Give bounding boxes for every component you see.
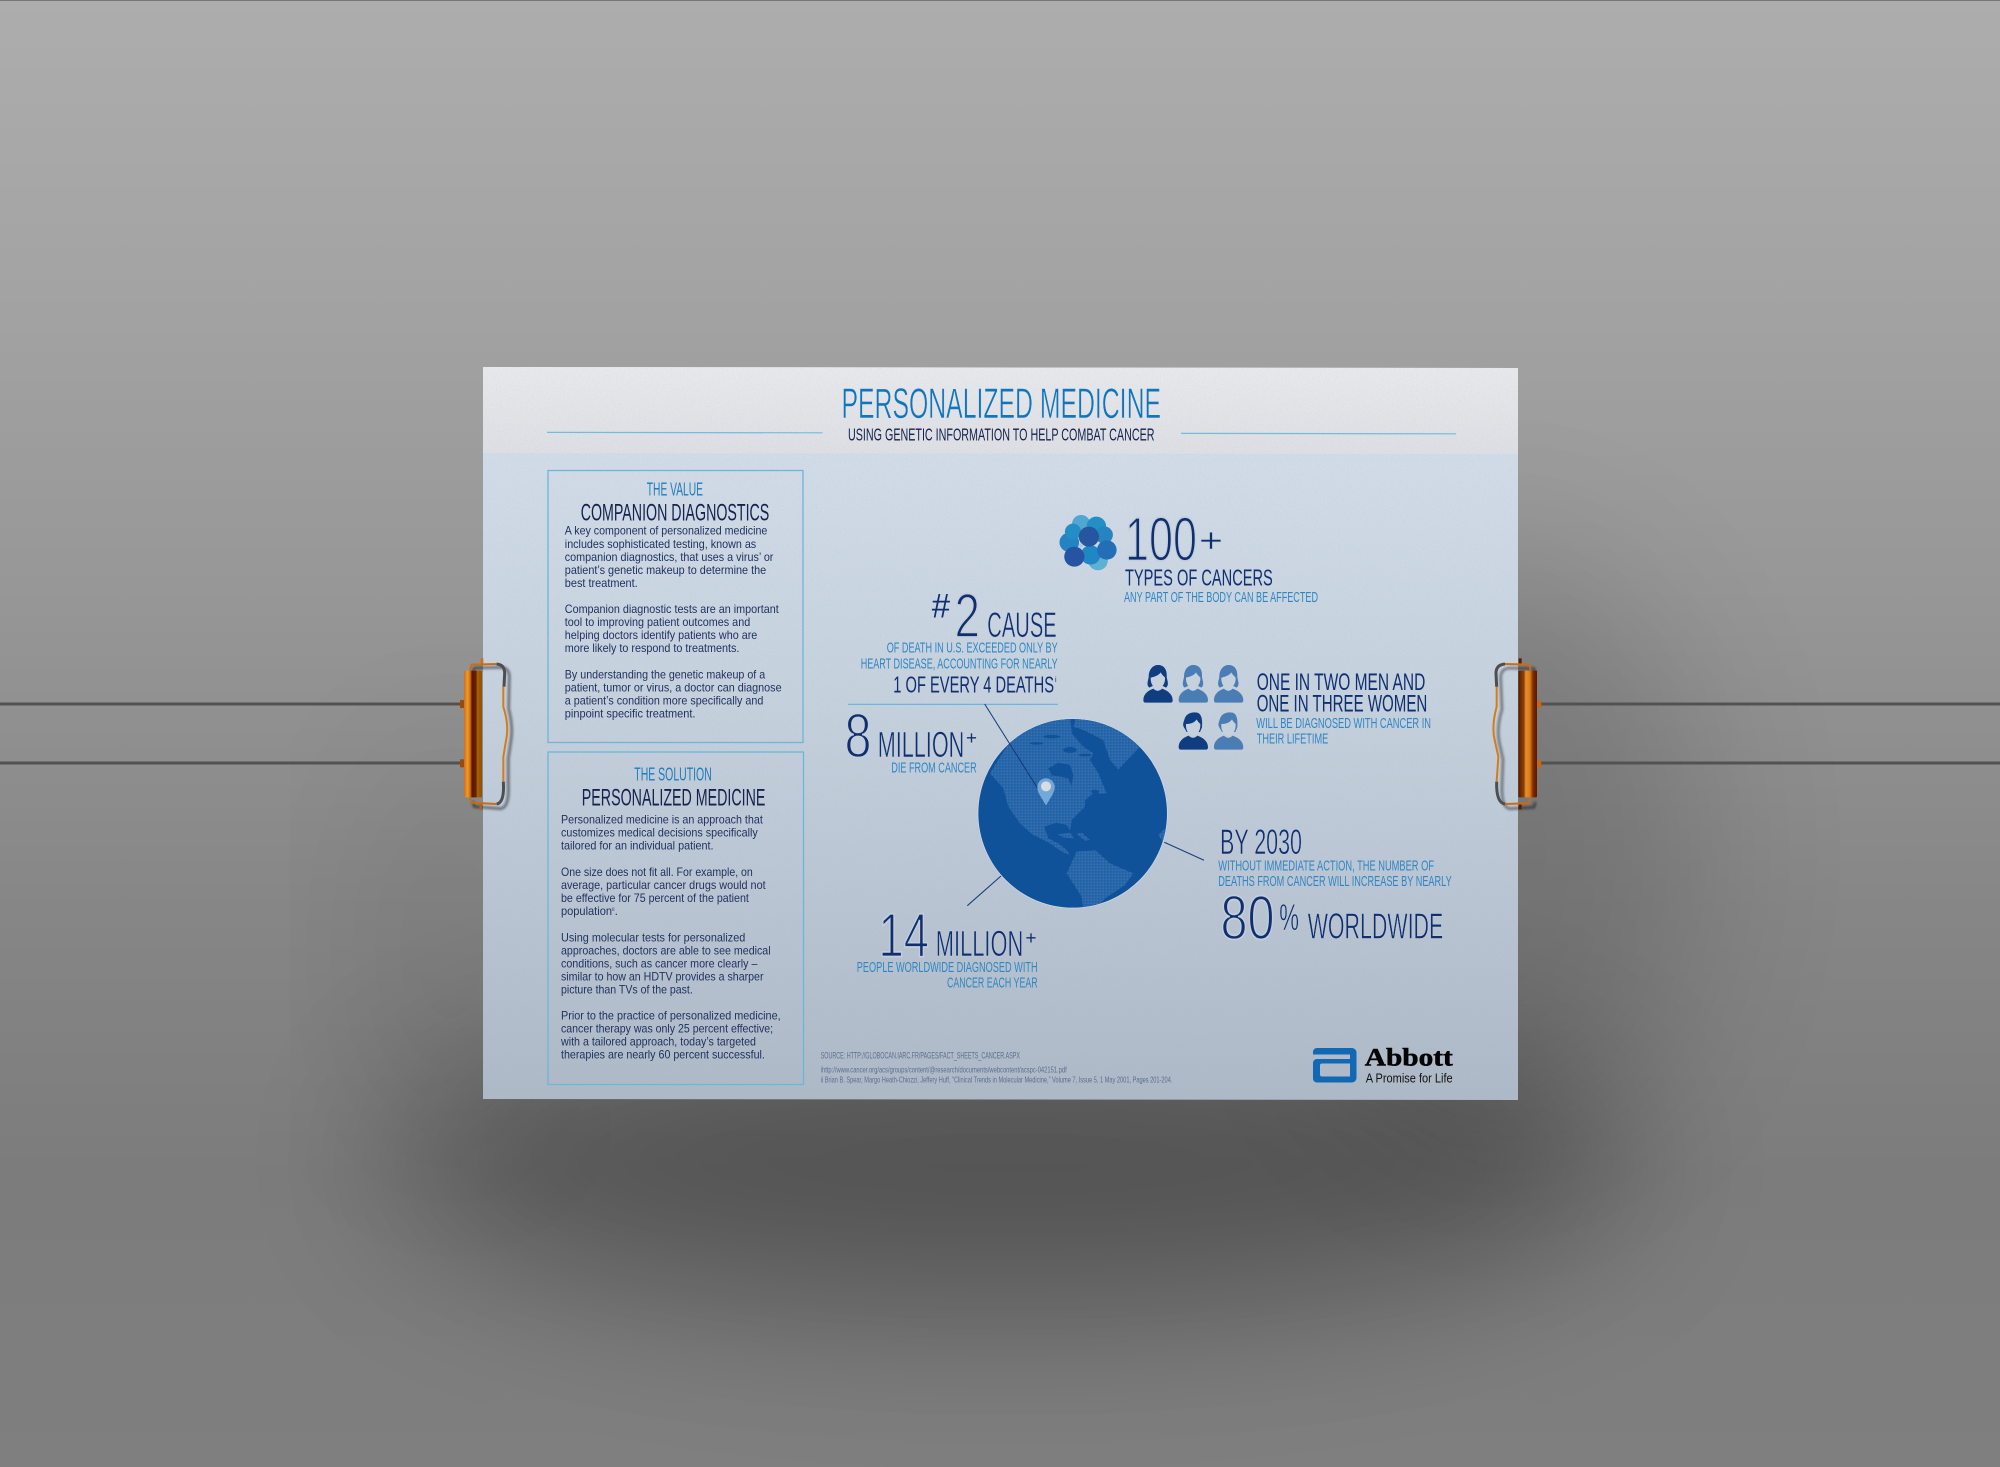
panel body text: more likely to respond to treatments. [565,641,739,655]
panel eyebrow: THE VALUE [647,479,703,500]
poster paper [483,367,1518,1100]
title: PERSONALIZED MEDICINE [842,381,1161,428]
stat: by 2030, 80% worldwide: 80 [1220,884,1274,953]
stat: 100+ types of cancers: 100 [1125,506,1197,575]
panel body text: patient, tumor or virus, a doctor can diagnose [565,680,782,694]
leader line to 14 million [967,876,1001,906]
stat: #2 cause: 1 OF EVERY 4 DEATHS [893,671,1054,697]
panel body text: approaches, doctors are able to see medical [561,943,771,957]
panel body text: best treatment. [565,576,638,590]
subtitle: USING GENETIC INFORMATION TO HELP COMBAT CANCER [848,424,1154,444]
panel: the value, companion diagnostics [548,470,803,742]
panel body text: Prior to the practice of personalized medicine, [561,1009,781,1023]
icon: cancer cell cluster [1059,515,1117,570]
panel body text: Using molecular tests for personalized [561,930,745,944]
icon: woman highlighted [1143,665,1173,703]
panel body text: conditions, such as cancer more clearly – [561,956,758,970]
stat: 8 million die [844,702,977,776]
header rule left [547,431,822,434]
panel body text: patient’s genetic makeup to determine the [565,563,766,577]
icon: woman [1179,665,1208,703]
logo: Abbott: A Promise for Life [1366,1072,1453,1086]
map: inland seas [1030,735,1099,794]
clip: left binder clip [460,658,512,809]
panel heading: COMPANION DIAGNOSTICS [581,500,769,527]
panel body text: helping doctors identify patients who are [565,628,758,642]
stat: 8 million die: + [966,728,977,748]
panel body text: pinpoint specific treatment. [565,706,696,720]
panel body text: be effective for 75 percent of the patient [561,891,749,905]
divider under #2 cause [848,703,1058,705]
panel body text: One size does not fit all. For example, on [561,865,753,879]
panel body text: population [561,904,612,918]
stat: one in two men and one in three women: ONE IN TWO MEN AND [1257,669,1425,696]
sources and footnotes [821,1051,1172,1085]
panel body text: Companion diagnostic tests are an important [565,602,779,616]
stat: one in two men and one in three women [1256,669,1431,747]
sources and footnotes: ihttp://www.cancer.org/acs/groups/content/@research/documents/webcontent/acspc-042151.pdf [821,1065,1067,1075]
stat: one in two men and one in three women: ONE IN THREE WOMEN [1257,690,1427,717]
map: continents [990,715,1173,910]
stat: #2 cause: i [1055,677,1057,684]
panel body text: tailored for an individual patient. [561,839,714,853]
stat: #2 cause [861,582,1058,697]
leader line to by 2030 [1164,842,1204,860]
hanging wires right [1541,702,2000,764]
panel body text: picture than TVs of the past. [561,982,693,996]
stat: by 2030, 80% worldwide: DEATHS FROM CANCER WILL INCREASE BY NEARLY [1218,873,1452,890]
panel body text: with a tailored approach, today’s targeted [560,1035,756,1049]
stat: by 2030, 80% worldwide: BY 2030 [1220,822,1302,862]
header rule right [1181,432,1456,435]
stat: 14 million diagnosed: CANCER EACH YEAR [947,975,1038,992]
hanging wires left [0,702,462,764]
panel body text: a patient’s condition more specifically and [565,694,763,708]
stat: #2 cause: 2 [954,582,980,651]
logo: Abbott [1313,1045,1454,1086]
panel body text: includes sophisticated testing, known as [565,537,756,551]
panel body text: companion diagnostics, that uses a virus’ or [565,550,773,564]
stat: one in two men and one in three women: THEIR LIFETIME [1257,730,1328,747]
icon: man highlighted [1179,712,1208,750]
panel body text [565,523,782,720]
panel heading: PERSONALIZED MEDICINE [582,785,765,812]
sources and footnotes: SOURCE: HTTP://GLOBOCAN.IARC.FR/PAGES/FACT_SHEETS_CANCER.ASPX [821,1051,1020,1061]
clip: right binder clip [1493,658,1541,809]
stat: 8 million die: 8 [844,702,872,771]
icon: woman [1214,665,1243,703]
stat: 14 million diagnosed: + [1026,928,1036,948]
icon: Abbott mark [1313,1048,1356,1082]
leader line to #2 cause [985,704,1038,788]
panel body text: . [615,904,618,918]
panel body text: ii [612,907,615,913]
stat: by 2030, 80% worldwide: WORLDWIDE [1308,906,1443,946]
stat: 100+ types of cancers: TYPES OF CANCERS [1125,564,1273,590]
map pin [1037,778,1055,806]
stat: by 2030, 80% worldwide [1218,822,1452,953]
panel body text: therapies are nearly 60 percent successful. [561,1048,765,1062]
stat: 14 million diagnosed: PEOPLE WORLDWIDE DIAGNOSED WITH [857,959,1038,976]
icon: man [1214,712,1243,750]
panel body text: tool to improving patient outcomes and [565,615,750,629]
stat: 100+ types of cancers: ANY PART OF THE BODY CAN BE AFFECTED [1124,589,1318,606]
icons: people, women and men [1143,665,1243,750]
sources and footnotes: ii Brian B. Spear, Margo Heath-Chiozzi, Jeffery Huff, “Clinical Trends in Molecular Medicine,” Volume 7, Issue 5, 1 May 2001, Pages 201-204. [821,1075,1172,1085]
panel body text: similar to how an HDTV provides a sharper [561,969,764,983]
stat: #2 cause: # [932,588,950,626]
stat: by 2030, 80% worldwide: % [1279,897,1299,938]
stat: #2 cause: HEART DISEASE, ACCOUNTING FOR NEARLY [861,655,1058,672]
stat: 100+ types of cancers: + [1199,522,1223,560]
panel body text: cancer therapy was only 25 percent effective; [561,1022,773,1036]
panel body text: average, particular cancer drugs would not [561,878,766,892]
panel body text [560,813,781,1062]
panel body text: Personalized medicine is an approach that [561,813,763,827]
stat: 14 million diagnosed [857,902,1038,992]
stat: 8 million die: MILLION [878,724,964,765]
panel body text: A key component of personalized medicine [565,523,768,537]
logo: Abbott: Abbott [1365,1045,1454,1072]
stat: by 2030, 80% worldwide: WITHOUT IMMEDIATE ACTION, THE NUMBER OF [1218,858,1434,875]
stat: 100+ types of cancers [1124,506,1318,606]
stat: 8 million die: DIE FROM CANCER [891,759,977,776]
panel eyebrow: THE SOLUTION [634,764,712,785]
panel body text: customizes medical decisions specifically [561,826,758,840]
stat: #2 cause: CAUSE [987,605,1057,645]
stat: #2 cause: OF DEATH IN U.S. EXCEEDED ONLY BY [887,640,1058,657]
stat: 14 million diagnosed: MILLION [936,923,1023,964]
stat: one in two men and one in three women: WILL BE DIAGNOSED WITH CANCER IN [1256,715,1431,732]
panel body text: By understanding the genetic makeup of a [565,668,765,682]
chart: globe with map pin [978,704,1173,910]
panel: the solution, personalized medicine [548,752,804,1084]
stat: 14 million diagnosed: 14 [878,902,929,971]
